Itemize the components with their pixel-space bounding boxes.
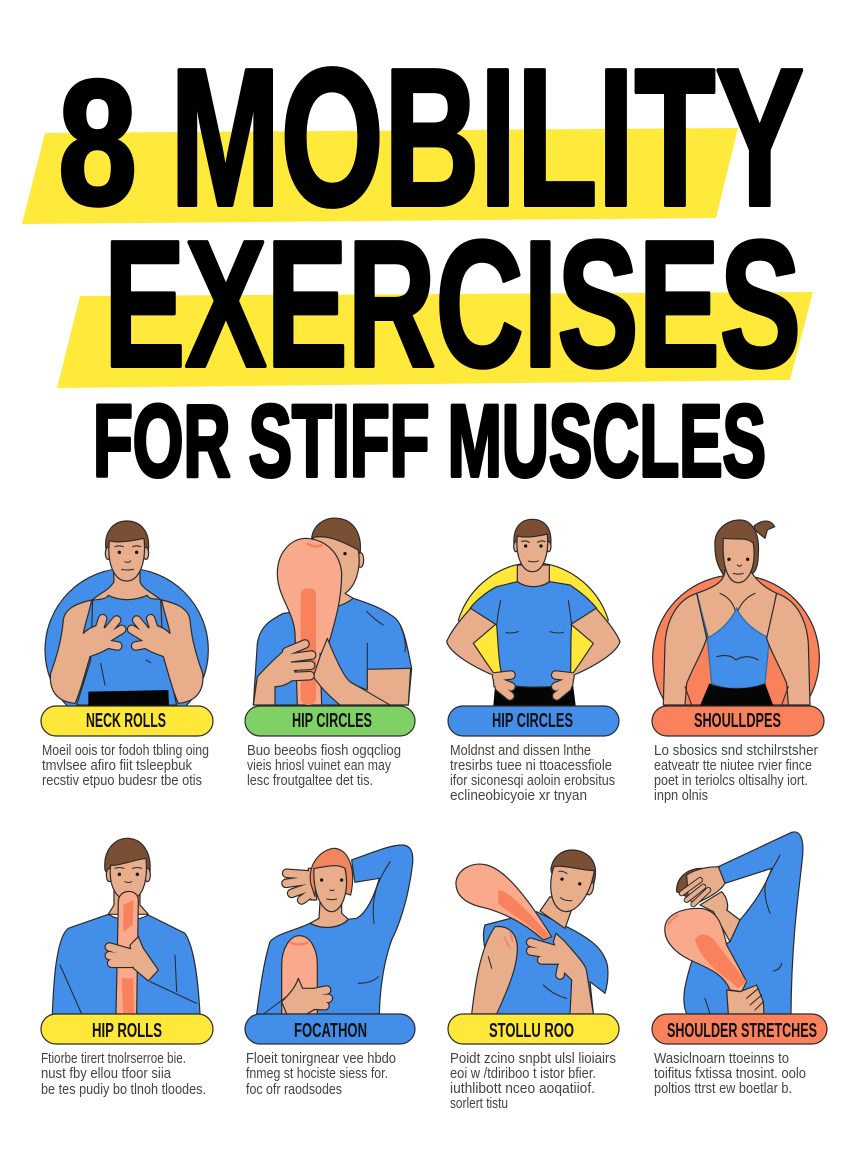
label pill: neck rolls: NECK ROLLS (86, 710, 166, 732)
illustration: figure holding vertical limb (52, 838, 200, 1014)
description: focathon (246, 1051, 396, 1098)
card: shoulder (652, 520, 824, 804)
illustration: arm raised behind head figure (257, 845, 413, 1014)
card: stollu roo (448, 845, 619, 1112)
description: focathon: foc ofr raodsodes (246, 1082, 342, 1098)
description: shoulldpes: eatveatr tte niutee rvier fince (654, 758, 812, 774)
label pill: focathon: FOCATHON (294, 1020, 367, 1042)
card: hip circles blue (447, 519, 620, 804)
description: hip circles green: Buo beeobs fiosh ogqcliog (247, 743, 401, 759)
label pill: focathon (245, 1014, 415, 1044)
description: shoulder stretches (654, 1051, 806, 1097)
description: hip circles blue: tresirbs tuee ni ttoacessfiole (450, 758, 612, 774)
title: 8: 8 (58, 43, 137, 242)
description: stollu roo: Poidt zcino snpbt ulsl lioiairs (450, 1051, 616, 1067)
label pill: hip circles green: HIP CIRCLES (292, 710, 372, 732)
label pill: neck rolls (41, 706, 213, 736)
label pill: shoulldpes: SHOULLDPES (694, 710, 781, 732)
label pill: shoulder stretches (652, 1014, 827, 1044)
description: hip circles green: lesc froutgaltee det tis. (247, 773, 373, 789)
label pill: shoulldpes (652, 706, 824, 736)
description: shoulldpes: poet in teriolcs oltisalhy iort. (654, 773, 808, 789)
label pill: hip rolls: HIP ROLLS (92, 1020, 162, 1042)
label pill: hip circles green (245, 706, 415, 736)
description: hip circles green: vieis hriosl vuinet ean may (247, 758, 392, 774)
description: hip circles blue: Moldnst and dissen lnthe (450, 743, 591, 759)
illustration: neck rolls figure (45, 521, 208, 732)
illustration: arm over head figure (665, 832, 803, 1014)
label pill: hip rolls (41, 1014, 213, 1044)
description: hip rolls: Ftiorbe tirert tnolrserroe bie. (41, 1051, 186, 1067)
description: hip rolls (41, 1051, 206, 1098)
card: shoulder stretches (652, 832, 827, 1097)
description: shoulder stretches: Wasiclnoarn ttoeinns to (654, 1051, 789, 1067)
description: stollu roo: eoi w /tdiriboo t istor bfier. (450, 1066, 596, 1082)
highlight band: top (22, 128, 738, 224)
card: hip circles green (245, 518, 415, 789)
label pill: stollu roo (448, 1014, 619, 1044)
description: hip circles blue (450, 743, 615, 804)
illustration: figure with diagonal limb (456, 845, 608, 1014)
illustration: hands on hips figure (447, 519, 620, 706)
description: hip rolls: nust fby ellou tfoor siia (41, 1066, 172, 1082)
card: neck rolls (41, 521, 213, 789)
description: hip circles green (247, 743, 401, 789)
description: shoulldpes (654, 743, 818, 804)
description: hip rolls: be tes pudiy bo tlnoh tloodes. (41, 1082, 206, 1098)
description: shoulldpes: inpn olnis (654, 788, 708, 804)
description: hip circles blue: ifor siconesqi aoloin erobsitus (450, 773, 615, 789)
label pill: stollu roo: STOLLU ROO (489, 1020, 574, 1042)
highlight band: bottom (57, 292, 813, 388)
illustration: hip circles figure with highlighted limb (253, 518, 412, 705)
description: focathon: Floeit tonirgnear vee hbdo (246, 1051, 396, 1067)
description: neck rolls: Moeil oois tor fodoh tbling oing (42, 743, 209, 759)
label pill: hip circles blue: HIP CIRCLES (492, 710, 573, 732)
description: shoulder stretches: poltios ttrst ew boetlar b. (654, 1081, 792, 1097)
card: focathon (245, 845, 415, 1098)
description: focathon: fnmeg st hociste siess for. (246, 1066, 388, 1082)
illustration: tank top figure (653, 520, 819, 706)
description: neck rolls (42, 743, 209, 789)
description: stollu roo: iuthlibott nceo aoqatiiof. (450, 1081, 595, 1097)
description: neck rolls: tmvlsee afiro fiit tsleepbuk (42, 758, 193, 774)
description: shoulldpes: Lo sbosics snd stchilrstsher (654, 743, 818, 759)
description: shoulder stretches: toifitus fxtissa tnosint. oolo (654, 1066, 806, 1082)
description: stollu roo: sorlert tistu (450, 1096, 508, 1112)
label pill: hip circles blue (448, 706, 619, 736)
description: stollu roo (450, 1051, 616, 1112)
card: hip rolls (41, 838, 213, 1098)
description: hip circles blue: eclineobicyoie xr tnyan (450, 788, 587, 804)
description: neck rolls: recstiv etpuo budesr tbe otis (42, 773, 202, 789)
